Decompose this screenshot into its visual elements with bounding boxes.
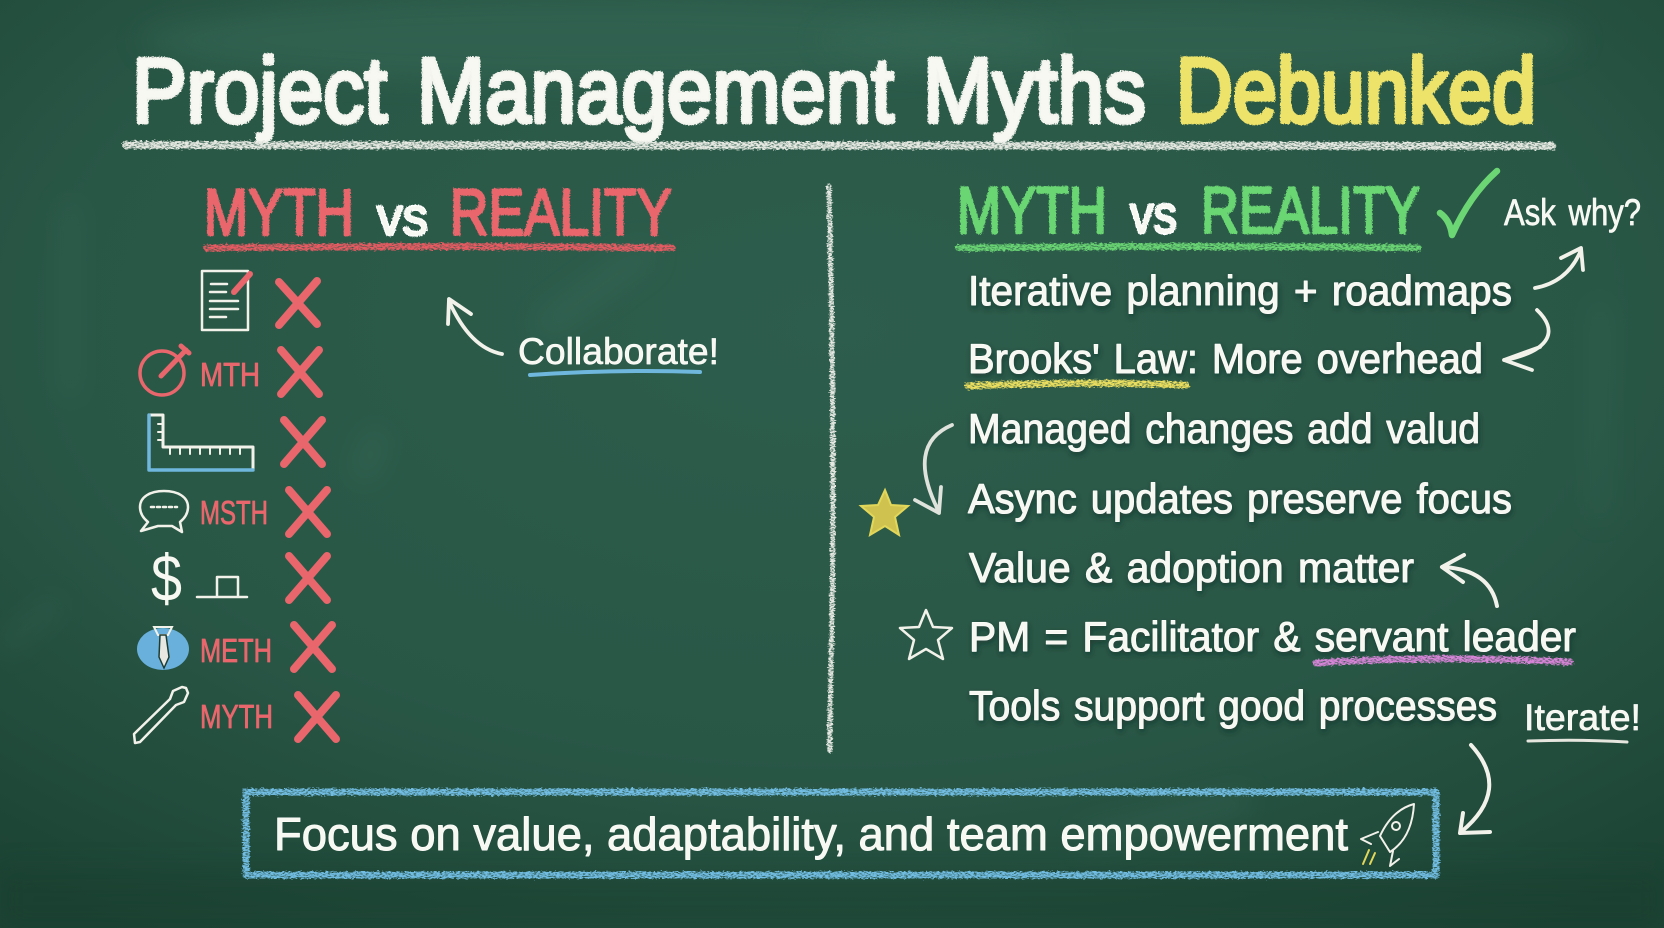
right heading: myth vs reality: MYTH [957, 173, 1107, 247]
left heading: myth vs reality: MYTH [204, 175, 354, 249]
cross 4 [289, 490, 327, 534]
takeaway box [246, 792, 1436, 875]
icon: yellow star [861, 490, 908, 535]
label: MYTH: MYTH [200, 698, 273, 735]
right heading underline [959, 246, 1418, 248]
icon: outline star [900, 610, 952, 659]
cross 7 [298, 695, 336, 739]
arrow: to takeaway [1460, 745, 1490, 833]
icon: dollar and bar [151, 541, 247, 615]
note: ask why: Ask why? [1504, 192, 1641, 233]
right heading: myth vs reality: vs [1130, 185, 1177, 245]
arrow: managed to async [915, 425, 952, 513]
reality list: Async updates preserve focus [968, 475, 1512, 522]
note: collaborate: Collaborate! [518, 331, 719, 372]
takeaway box: Focus on value, adaptability, and team empowerment [274, 808, 1348, 860]
title: Myths [923, 40, 1146, 142]
icon: green check [1440, 171, 1497, 235]
underline: Brooks' Law [968, 383, 1186, 386]
left heading: myth vs reality: REALITY [450, 175, 672, 249]
icon: dollar and bar: $ [151, 541, 182, 615]
cross 6 [294, 625, 332, 669]
cross 2 [281, 350, 319, 394]
icon: target with arrow [140, 346, 189, 395]
cross 3 [284, 420, 322, 464]
arrow: collaborate [448, 299, 502, 354]
icon: rocket [1361, 804, 1414, 866]
label: MTH: MTH [200, 356, 260, 393]
icon: suit and tie [137, 627, 189, 670]
title: Debunked [1176, 40, 1536, 142]
left myth list [134, 271, 336, 743]
underline: servant leader [1316, 659, 1570, 663]
arrow: roadmaps to Brooks [1504, 310, 1549, 370]
label: METH: METH [200, 632, 272, 669]
icon: document with pen [202, 271, 250, 330]
right heading: myth vs reality [957, 173, 1420, 247]
reality list: Brooks' Law: More overhead [968, 335, 1483, 382]
reality list [968, 267, 1576, 729]
title: Management [417, 40, 894, 142]
reality list: Iterative planning + roadmaps [968, 267, 1512, 314]
left heading: myth vs reality: vs [377, 187, 428, 247]
icon: marker pen [134, 687, 188, 743]
label: MSTH: MSTH [200, 494, 268, 531]
reality list: Tools support good processes [969, 682, 1497, 729]
title [132, 40, 1536, 142]
left heading: myth vs reality [204, 175, 672, 249]
left heading underline [207, 246, 672, 248]
arrow: PM to value [1442, 555, 1497, 606]
icon: speech bubble [140, 491, 188, 532]
icon: ruler [149, 415, 253, 470]
cross 5 [289, 556, 327, 600]
reality list: Value & adoption matter [969, 544, 1414, 591]
title underline [126, 145, 1552, 146]
center divider [829, 186, 833, 751]
title: Project [132, 40, 387, 142]
reality list: PM = Facilitator & servant leader [969, 613, 1576, 660]
right heading: myth vs reality: REALITY [1201, 173, 1420, 247]
reality list: Managed changes add valud [968, 405, 1480, 452]
note: iterate: Iterate! [1524, 697, 1641, 738]
arrow: ask why [1535, 248, 1583, 288]
cross 1 [279, 281, 317, 325]
